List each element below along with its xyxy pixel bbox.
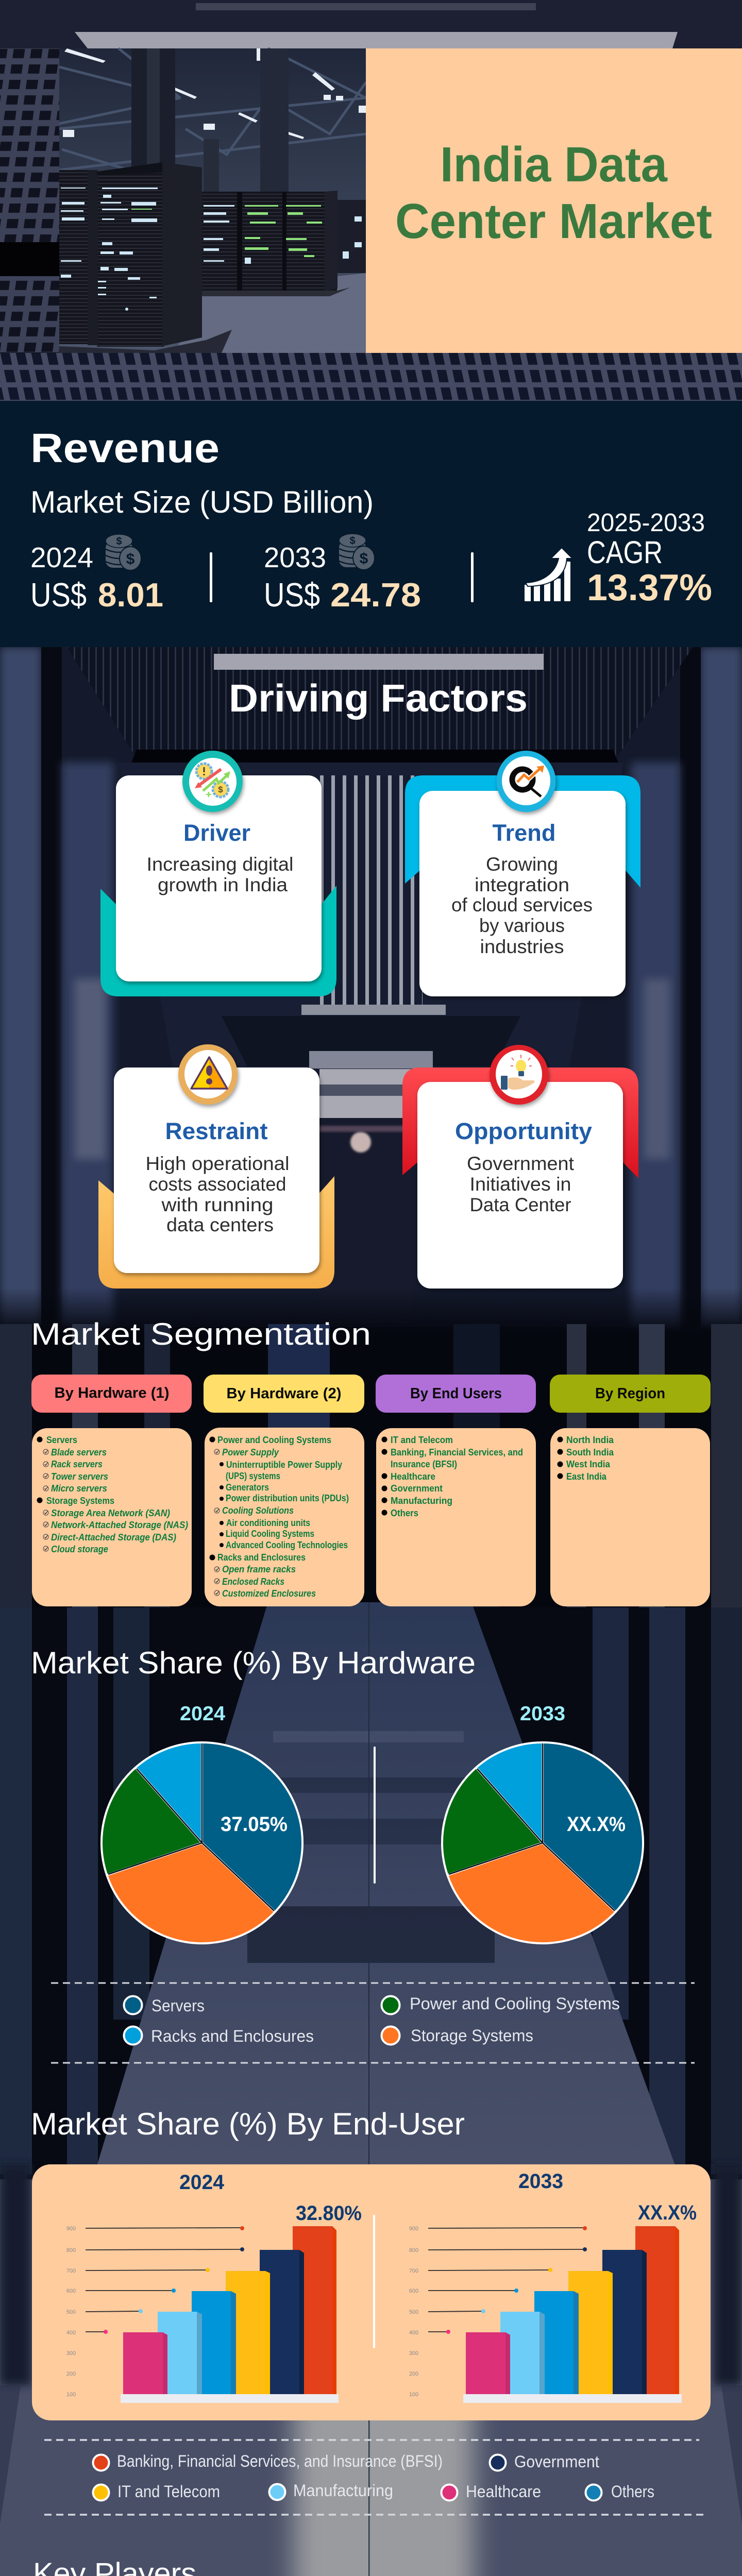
stat: cagr: 13.37%: [587, 567, 712, 608]
value: XX.X%: [567, 1813, 626, 1836]
list card: Blade servers: [51, 1447, 107, 1458]
bar chart 2033: 500: [409, 2309, 418, 2315]
text block: Government: [467, 1153, 575, 1174]
icon: growth arrow: [525, 548, 572, 601]
legend: end-user: Government: [514, 2452, 599, 2471]
text block: by various: [479, 915, 565, 936]
bar chart 2024: 400: [66, 2330, 76, 2336]
list card: [550, 1428, 710, 1606]
text block: [467, 1153, 575, 1215]
heading: market share by hardware: Market Share (%) By Hardware: [31, 1646, 476, 1680]
bar chart 2033: 100: [409, 2392, 418, 2398]
hero photo: server room: [59, 48, 742, 353]
panel: by region: [550, 1375, 711, 1606]
panel: end-user bar charts: [32, 2164, 711, 2420]
panel: trend: [405, 751, 640, 996]
list card: (UPS) systems: [226, 1471, 280, 1481]
value: 32.80%: 32.80%: [296, 2202, 362, 2225]
legend: hardware: Power and Cooling Systems: [410, 1994, 620, 2013]
bar chart 2024: 100: [66, 2392, 76, 2398]
text block: data centers: [166, 1214, 274, 1235]
label: pie year 2033: 2033: [520, 1703, 565, 1725]
list card: Cooling Solutions: [222, 1505, 294, 1516]
title: Center Market: [395, 194, 712, 249]
title: [395, 137, 712, 249]
stat: 2033: 2033: [264, 541, 326, 573]
text block: [145, 1153, 290, 1235]
list card: Servers: [46, 1435, 77, 1445]
heading: market share by end-user: Market Share (%) By End-User: [31, 2107, 465, 2141]
text block: High operational: [145, 1153, 290, 1174]
list card: Rack servers: [51, 1459, 103, 1469]
icon: coins 2024: [106, 534, 141, 570]
icon: coins 2033: [339, 534, 375, 570]
icon: coins 2033: $: [360, 550, 368, 567]
stat: cagr: 2025-2033: [587, 509, 705, 537]
list card: Healthcare: [391, 1471, 435, 1482]
heading: market segmentation: Market Segmentation: [31, 1317, 371, 1351]
list card: Cloud storage: [51, 1544, 108, 1554]
bar chart 2024: 300: [66, 2350, 76, 2357]
icon: trend: [497, 751, 555, 812]
text block: Initiatives in: [470, 1174, 571, 1195]
stat: 2033: US$: [264, 576, 320, 614]
bar chart 2024: 900: [66, 2226, 76, 2232]
list card: Insurance (BFSI): [391, 1459, 457, 1469]
value: 37.05%: [221, 1813, 288, 1836]
legend: end-user: Banking, Financial Services, and Insurance (BFSI): [117, 2452, 443, 2470]
list card: South India: [566, 1447, 614, 1458]
value: XX.X%: XX.X%: [638, 2201, 697, 2224]
list card: Storage Area Network (SAN): [51, 1508, 170, 1518]
icon: opportunity: [490, 1045, 548, 1105]
icon: restraint: [178, 1044, 238, 1105]
label: 2024: 2024: [179, 2171, 225, 2194]
panel: by end users: [376, 1375, 536, 1606]
text block: industries: [480, 936, 564, 957]
subheading: market size: Market Size (USD Billion): [30, 485, 374, 519]
list card: Racks and Enclosures: [217, 1552, 306, 1563]
label: 2033: 2033: [518, 2170, 563, 2193]
panel: restraint: [98, 1044, 334, 1289]
list card: [32, 1428, 192, 1606]
list card: Open frame racks: [222, 1564, 296, 1574]
bar chart 2033: 400: [409, 2330, 418, 2336]
legend: end-user: Manufacturing: [293, 2481, 393, 2500]
panel: by hardware 2: By Hardware (2): [227, 1385, 341, 1402]
list card: IT and Telecom: [391, 1435, 453, 1445]
legend: end-user: IT and Telecom: [117, 2482, 220, 2501]
text block: integration: [475, 874, 569, 895]
list card: Direct-Attached Storage (DAS): [51, 1532, 176, 1543]
list card: Government: [391, 1483, 443, 1494]
bar chart 2033: 900: [409, 2226, 418, 2232]
panel: by hardware 1: [31, 1375, 192, 1606]
stat: 2024: 8.01: [98, 576, 163, 614]
heading: Driver: [183, 820, 250, 846]
bar chart 2033: 600: [409, 2288, 418, 2294]
list card: Storage Systems: [46, 1496, 114, 1506]
bar chart 2024: 700: [66, 2268, 76, 2274]
list card: [205, 1428, 364, 1606]
panel: opportunity: [402, 1045, 638, 1289]
bar chart 2024: 500: [66, 2309, 76, 2315]
list card: Power and Cooling Systems: [217, 1435, 331, 1445]
list card: West India: [566, 1459, 611, 1469]
text block: Growing: [486, 854, 558, 875]
heading: Opportunity: [455, 1118, 592, 1144]
bar chart 2033: 300: [409, 2350, 418, 2357]
list card: Banking, Financial Services, and: [391, 1447, 523, 1458]
legend: end-user: Others: [611, 2482, 654, 2501]
legend: hardware: Servers: [151, 1996, 205, 2015]
text block: [146, 854, 294, 895]
list card: Customized Enclosures: [222, 1588, 316, 1599]
bar chart 2033: 200: [409, 2371, 418, 2377]
list card: Network-Attached Storage (NAS): [51, 1520, 188, 1530]
legend: end-user: Healthcare: [466, 2482, 541, 2501]
stat: 2024: 2024: [30, 541, 93, 573]
heading: driving factors: Driving Factors: [229, 676, 528, 720]
list card: Manufacturing: [391, 1496, 452, 1506]
list card: Generators: [226, 1482, 269, 1493]
list card: Power distribution units (PDUs): [226, 1493, 349, 1503]
stat: 2033: 24.78: [330, 576, 421, 614]
list card: Liquid Cooling Systems: [226, 1529, 314, 1539]
text block: costs associated: [148, 1174, 286, 1195]
list card: Micro servers: [51, 1483, 107, 1494]
stat: cagr: CAGR: [587, 535, 663, 570]
panel: driver: [100, 751, 336, 996]
title: India Data: [440, 137, 668, 192]
label: pie year 2024: 2024: [180, 1703, 225, 1725]
text block: Data Center: [470, 1194, 571, 1215]
heading: Trend: [493, 820, 555, 846]
panel: by hardware 1: By Hardware (1): [55, 1385, 169, 1401]
list card: [376, 1428, 536, 1606]
icon: coins 2024: $: [126, 551, 135, 568]
text block: of cloud services: [451, 894, 593, 916]
legend: end-user: [93, 2452, 654, 2501]
text block: growth in India: [158, 874, 288, 895]
legend: hardware: [124, 1994, 620, 2045]
legend: hardware: Storage Systems: [411, 2026, 533, 2045]
list card: Air conditioning units: [226, 1518, 310, 1528]
heading: revenue: Revenue: [30, 425, 220, 471]
pie chart 2033: [442, 1742, 643, 1943]
list card: Enclosed Racks: [222, 1577, 284, 1587]
bar chart 2033: 700: [409, 2268, 418, 2274]
icon: driver: $: [218, 785, 223, 794]
bar chart 2024: [66, 2226, 339, 2403]
bar chart 2024: 200: [66, 2371, 76, 2377]
list card: Advanced Cooling Technologies: [226, 1540, 348, 1550]
list card: Uninterruptible Power Supply: [226, 1460, 342, 1470]
pie chart 2024: [102, 1742, 302, 1943]
icon: coins 2024: $: [116, 536, 122, 547]
text block: with running: [161, 1194, 273, 1215]
stat: 2024: [30, 541, 163, 614]
panel: revenue band: [0, 401, 742, 647]
list card: Others: [391, 1508, 418, 1518]
bar chart 2033: 800: [409, 2247, 418, 2253]
panel: by region: By Region: [595, 1385, 665, 1402]
stat: 2033: [264, 541, 421, 614]
legend: hardware: Racks and Enclosures: [151, 2027, 314, 2045]
bar chart 2024: 800: [66, 2247, 76, 2253]
text block: [451, 854, 593, 957]
list card: Power Supply: [222, 1447, 279, 1458]
heading: Restraint: [165, 1118, 268, 1144]
text block: Increasing digital: [146, 854, 294, 875]
stat: 2024: US$: [30, 576, 87, 614]
list card: Tower servers: [51, 1471, 108, 1482]
list card: North India: [566, 1435, 614, 1445]
icon: coins 2033: $: [349, 535, 356, 547]
bar chart 2024: 600: [66, 2288, 76, 2294]
bar chart 2033: [409, 2226, 682, 2403]
list card: East India: [566, 1471, 607, 1482]
icon: driver: [182, 751, 243, 812]
panel: by end users: By End Users: [410, 1385, 502, 1402]
panel: by hardware 2: [204, 1375, 364, 1606]
stat: cagr: [587, 509, 712, 608]
